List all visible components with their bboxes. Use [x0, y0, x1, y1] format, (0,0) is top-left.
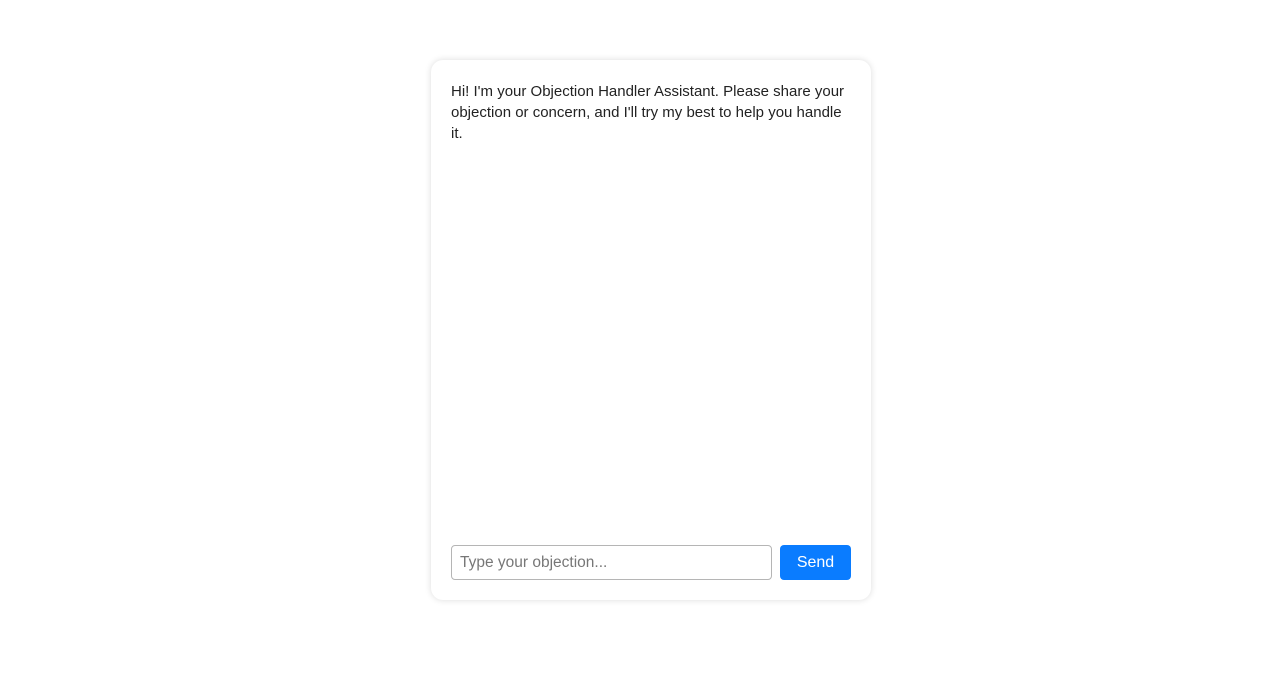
input field: [451, 545, 772, 580]
button: send: Send: [797, 554, 834, 571]
panel: chat card: [431, 60, 871, 600]
input field: Type your objection...: [460, 554, 607, 571]
button: send: [780, 545, 851, 580]
text: assistant greeting: Hi! I'm your Objection Handler Assistant. Please share your objection or concern, and I'll try my best to help you handle it.: [451, 83, 844, 142]
